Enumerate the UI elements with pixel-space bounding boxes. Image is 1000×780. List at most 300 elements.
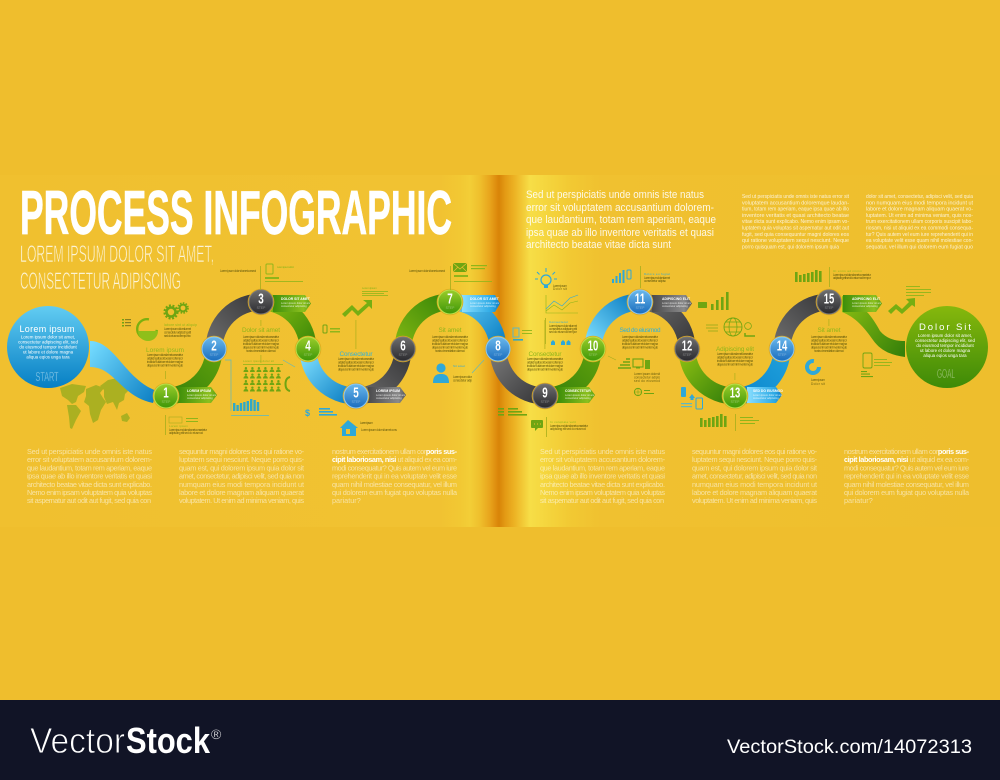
text block: Consectetur green: incididunt ut labore et dolore magna: [527, 364, 563, 368]
label: step 6 dash note: Lorem ipsum dolor sit amet consect: [409, 269, 445, 273]
body column 1: Sed ut perspiciatis unde omnis iste natus: [27, 447, 152, 456]
callout: note above step 3: [220, 264, 303, 290]
callout: note above step 3: Lorem ipsum dolor: [277, 265, 294, 269]
callout: note above step 3: Lorem ipsum dolor sit amet consect: [220, 269, 256, 273]
body column 6: reprehenderit qui in ea voluptate velit esse: [844, 472, 969, 481]
text block: Lorem ipsum: aliqua ut enim ad minim veniam quis: [147, 364, 183, 368]
footer logo: ®: [211, 726, 222, 742]
body column 6: cipit laboriosam, nisi ut aliquid ex ea com-: [844, 455, 970, 464]
text block: Consectetur blue: [338, 320, 375, 372]
node 10: 10: [588, 338, 598, 354]
text block: Sed do eiusmod: Sed do eiusmod: [620, 327, 661, 334]
text block: Adipiscing elit: Adipiscing elit: [716, 346, 754, 353]
tag: step 7: [462, 295, 500, 312]
text block: Sit amet: aliqua ut enim ad minim veniam quis: [432, 346, 468, 350]
text block: Consectetur green: [527, 320, 564, 372]
label: gear note: Lorem ipsum dolor sit amet: [164, 327, 191, 331]
node 7: 7: [447, 292, 453, 308]
node 1: 1: [163, 386, 169, 402]
text block: Sit amet: Sit amet: [438, 327, 462, 334]
body column 6: quam nihil molestiae consequatur, vel illum: [844, 480, 969, 489]
text block: Consectetur green: Consectetur: [528, 351, 562, 358]
start circle: Lorem ipsum dolor sit amet,: [21, 334, 75, 340]
node 13: 13: [730, 386, 740, 402]
chart: blue bars with phone: [612, 266, 670, 288]
node 2: [201, 336, 227, 362]
icon: computer: Lorem ipsum dolor sit: [634, 372, 660, 376]
node 15: STEP: [825, 306, 834, 310]
chart: green bars with envelope: [698, 292, 729, 310]
callout: below step 1: [165, 415, 208, 435]
bar chart: green upper right: Lorem ipsum dolor sit amet consectetur: [833, 273, 872, 277]
chart: blue bars with phone: Dolore eu fugiat: [644, 272, 670, 276]
label: step 4 callouts: [283, 325, 340, 367]
node 8: [485, 336, 511, 362]
node 4: 4: [305, 338, 311, 354]
node 4: [295, 336, 321, 362]
ribbon: start connector: [90, 341, 157, 403]
lead paragraph: architecto beatae vitae dicta sunt: [526, 239, 671, 251]
icon: house: Lorem ipsum dolor sit amet cons: [361, 428, 397, 432]
tag: step 1: consectetur adipiscing: [187, 396, 213, 400]
node 5: 5: [353, 386, 359, 402]
tag: step 5: consectetur adipiscing: [376, 396, 402, 400]
text block: Adipiscing elit: adipiscing elit sed do eiusmod tempor: [717, 356, 754, 360]
text block: Lorem ipsum: Lorem ipsum dolor sit amet consectetur: [147, 353, 184, 357]
body column 5: sequuntur magni dolores eos qui ratione vo-: [692, 447, 818, 456]
footer logo: Stock: [126, 720, 211, 761]
node 12: [674, 336, 700, 362]
body column 4: ipsa quae ab illo inventore veritatis et quasi: [540, 472, 665, 481]
node 6: [390, 336, 416, 362]
callout: consectetur note: Lorem ipsum dolor sit amet: [549, 324, 577, 328]
icon: person: consectetur adip: [453, 378, 472, 382]
start circle: ut labore et dolore magna: [23, 350, 74, 354]
chart: blue ring: Dolor sit: [811, 382, 825, 386]
title: PROCESS INFOGRAPHIC: [20, 179, 452, 248]
body column 2: quam est, qui dolorem ipsum quia dolor sit: [179, 463, 304, 472]
icon: house: Lorem ipsum: [360, 421, 373, 425]
body column 1: architecto beatae vitae dicta sunt explicabo.: [27, 480, 152, 489]
node 8: STEP: [494, 353, 503, 357]
tag: step 9: [558, 387, 595, 403]
icon: chat bubble: adipiscing elit sed do eiusmod: [550, 427, 586, 431]
ribbon: goal connector: [842, 296, 905, 357]
chart: blue ring: Lorem ipsum: [811, 378, 825, 382]
goal circle: Lorem ipsum dolor sit amet,: [918, 333, 972, 338]
tag: step 1: Lorem ipsum dolor sit am: [187, 393, 216, 397]
node 11: STEP: [636, 306, 645, 310]
node 12: STEP: [683, 353, 692, 357]
text block: Sed do eiusmod: Lorem ipsum dolor sit amet consectetur: [622, 335, 659, 339]
top text column 1: Sed ut perspiciatis unde omnis iste natus error sit: [742, 194, 849, 200]
text block: Consectetur blue: Lorem ipsum dolor sit amet consectetur: [338, 357, 375, 361]
body column 2: voluptatem. Ut enim ad minima veniam, quis: [179, 496, 304, 505]
body column 1: Nemo enim ipsam voluptatem quia voluptas: [27, 488, 152, 497]
tag: step 5: Lorem ipsum dolor sit am: [376, 393, 405, 397]
icon: chat bubble: In voluptate velit: [550, 420, 576, 424]
node 6: 6: [400, 338, 406, 354]
text block: Lorem ipsum: Lorem ipsum: [146, 347, 184, 354]
label: gear note: consectetur adipiscing elit: [164, 330, 191, 334]
label: gear note: [164, 323, 197, 338]
top text column 2: trum exercitationem ullam corporis suscipit labo-: [866, 219, 973, 225]
goal circle: aliqua eqios unga tara: [923, 353, 967, 358]
tag: step 9: consectetur adipiscing: [565, 396, 591, 400]
icon: envelope: [453, 263, 492, 282]
text block: Lorem ipsum: [146, 347, 184, 379]
node 2: 2: [211, 338, 217, 354]
body column 3: cipit laboriosam, nisi ut aliquid ex ea com-: [332, 455, 458, 464]
text block: Sit amet: [432, 327, 469, 353]
top text column 2: [866, 194, 973, 250]
node 1: STEP: [162, 400, 171, 404]
body column 5: quam est, qui dolorem ipsum quia dolor sit: [692, 463, 817, 472]
node 14: 14: [777, 338, 787, 354]
icon: people grid: [244, 367, 281, 392]
body column 6: nostrum exercitationem ullam corporis sus-: [844, 447, 970, 456]
icon: trend arrow: [342, 286, 388, 317]
start circle: [7, 306, 89, 388]
icon: house: [340, 420, 397, 436]
body column 5: voluptatem. Ut enim ad minima veniam, quis: [692, 496, 817, 505]
icon: computer: [608, 356, 660, 383]
icon: person: Lorem ipsum dolor: [453, 375, 473, 379]
chart: green pie with legend: [122, 318, 158, 341]
body column 1: que laudantium, totam rem aperiam, eaque: [27, 463, 152, 472]
subtitle: LOREM IPSUM DOLOR SIT AMET,: [20, 241, 214, 268]
body column 5: labore et dolore magnam aliquam quaerat: [692, 488, 817, 497]
chart: blue bars with phone: consectetur adipisc: [644, 279, 666, 283]
icon: globe with dollar: [706, 318, 755, 336]
goal circle: Dolor Sit: [919, 322, 971, 333]
step nodes: [153, 289, 842, 409]
text block: Sit amet: adipiscing elit sed do eiusmod tempor: [432, 338, 469, 342]
process ribbon arcs: [166, 302, 829, 396]
tag: step 15: Lorem ipsum dolor sit am: [852, 301, 881, 305]
chart: blue bars with phone: Lorem ipsum dolor sit amet: [644, 276, 670, 280]
top text column 1: vitae dicta sunt explicabo. Nemo enim ipsam vo-: [742, 219, 849, 225]
text block: Consectetur green: adipiscing elit sed do eiusmod tempor: [527, 360, 564, 364]
goal circle: ut labore et dolore magna: [920, 348, 971, 353]
chart: blue ring: [807, 361, 825, 386]
callout: consectetur note: consectetur adipiscing elit: [549, 327, 577, 331]
subtitle: [20, 241, 214, 295]
text block: Dolor sit amet: Dolor sit amet: [242, 327, 280, 334]
node 2: STEP: [210, 353, 219, 357]
text block: Consectetur green: Lorem ipsum dolor sit amet consectetur: [527, 357, 564, 361]
text block: Lorem ipsum: incididunt ut labore et dolore magna: [147, 360, 183, 364]
bar chart: green upper right: [795, 267, 872, 287]
text block: Adipiscing elit: aliqua ut enim ad minim veniam quis: [717, 362, 753, 366]
start circle: do eiusmod tempor incididunt: [19, 344, 77, 350]
icon: document left of step 9: [513, 328, 532, 341]
text block: Sit amet: Lorem ipsum dolor sit amet consectetur: [432, 335, 469, 339]
text block: Dolor sit amet: Lorem ipsum dolor sit amet consectetur: [243, 335, 280, 339]
node 11: [627, 289, 653, 315]
body column 5: amet, consectetur, adipisci velit, sed quia non: [692, 472, 817, 481]
node 9: STEP: [541, 400, 550, 404]
top text column 1: [742, 194, 849, 250]
label: step 9 legend bars: [498, 408, 527, 416]
top text column 2: sequatur, vel illum qui dolorem eum fugiat quo: [866, 244, 973, 250]
text block: Adipiscing elit: [716, 346, 754, 380]
node 3: 3: [258, 292, 264, 308]
lead paragraph: error sit voluptatem accusantium dolorem-: [526, 202, 714, 214]
chart: line chart: [546, 295, 578, 313]
tag: step 11: ADIPISCING ELIT: [662, 297, 691, 301]
tag: step 15: ADIPISCING ELIT: [852, 297, 881, 301]
node 10: STEP: [589, 353, 598, 357]
footer bar: [0, 700, 1000, 780]
text block: Sit amet right: Sit amet: [818, 327, 841, 334]
text block: Adipiscing elit: Lorem ipsum dolor sit amet consectetur: [717, 352, 754, 356]
label: step 6 dash note: [409, 266, 451, 290]
lead paragraph: [526, 189, 716, 251]
node 6: STEP: [399, 353, 408, 357]
text block: Sit amet right: nostrud exercitation ullamco: [814, 349, 844, 353]
tag: step 7: Lorem ipsum dolor sit am: [470, 301, 499, 305]
body column 4: [540, 447, 666, 505]
tag: step 13: [747, 387, 783, 403]
text block: Adipiscing elit: incididunt ut labore et dolore magna: [717, 359, 753, 363]
bar chart: green upper right: Ut enim ad minim: [833, 269, 862, 273]
bar chart: green lower: [700, 414, 759, 431]
top text column 2: ea voluptate velit esse quam nihil molestiae con-: [866, 238, 973, 244]
goal circle: do eiusmod tempor incididunt: [916, 343, 974, 348]
top text column 1: fugit, sed quia consequuntur magni dolores eos: [742, 232, 849, 238]
icon: phone handset: [286, 377, 290, 391]
body column 3: modi consequatur? Quis autem vel eum iure: [332, 463, 457, 472]
body column 1: error sit voluptatem accusantium dolorem-: [27, 455, 153, 464]
node 7: STEP: [446, 306, 455, 310]
text block: Dolor sit amet: nostrud exercitation ullamco: [246, 349, 276, 353]
node 13: STEP: [731, 400, 740, 404]
icon: small globe: [634, 388, 654, 396]
tag: step 13: Lorem ipsum dolor sit am: [753, 393, 782, 397]
tag: step 9: Lorem ipsum dolor sit am: [565, 393, 594, 397]
body column 6: modi consequatur? Quis autem vel eum iure: [844, 463, 969, 472]
text block: Sit amet: incididunt ut labore et dolore magna: [432, 342, 468, 346]
tag: step 3: [273, 295, 311, 312]
text block: Dolor sit amet: adipiscing elit sed do eiusmod tempor: [243, 338, 280, 342]
footer logo: Vector: [30, 720, 125, 761]
tag: step 1: [178, 387, 217, 403]
callout: consectetur note: [545, 318, 578, 345]
goal circle: GOAL: [937, 367, 955, 381]
top text column 2: dolor sit amet, consectetur, adipisci velit, sed quia: [866, 194, 973, 200]
tag: step 3: consectetur adipiscing: [281, 304, 307, 308]
icon: person: [433, 360, 484, 383]
text block: Sit amet right: incididunt ut labore et dolore magna: [811, 342, 847, 346]
body column 3: [332, 447, 458, 505]
text block: Dolor sit amet: [242, 320, 280, 363]
icon: trend arrow: Lorem ipsum: [362, 286, 378, 290]
top text column 1: voluptatem accusantium doloremque laudan-: [742, 200, 849, 206]
text block: Consectetur blue: adipiscing elit sed do eiusmod tempor: [338, 360, 375, 364]
body column 4: Sed ut perspiciatis unde omnis iste natus: [540, 447, 665, 456]
body column 4: que laudantium, totam rem aperiam, eaque: [540, 463, 665, 472]
body column 3: qui dolorem eum fugiat quo voluptas nulla: [332, 488, 458, 497]
tag: step 5: LOREM IPSUM: [376, 389, 400, 393]
lead paragraph: que laudantium, totam rem aperiam, eaque: [526, 214, 716, 226]
goal circle: consectetur adipiscing elit, sed: [915, 338, 975, 343]
node 9: [532, 383, 558, 409]
tag: step 15: [843, 295, 882, 312]
start circle: aliqua eqios unga tara: [26, 354, 70, 360]
icon: world map: [60, 378, 131, 429]
bar chart: teal: [225, 360, 269, 416]
icon: smartphone outline: [861, 353, 892, 377]
text block: Sed do eiusmod: [620, 327, 661, 350]
body column 4: Nemo enim ipsam voluptatem quia voluptas: [540, 488, 665, 497]
tag: step 5: [368, 387, 406, 403]
node 15: [816, 289, 842, 315]
callout: consectetur note: Consectetur: [549, 320, 568, 324]
top text column 1: porro quisquam est, qui dolorem ipsum quia: [742, 244, 839, 250]
body column 5: numquam eius modi tempora incidunt ut: [692, 480, 817, 489]
tag: step 15: consectetur adipiscing: [852, 304, 878, 308]
node 3: STEP: [257, 306, 266, 310]
label: gear note: sed do eiusmod tempor inc: [164, 334, 191, 338]
tag: step 3: DOLOR SIT AMET: [281, 297, 311, 301]
node 12: 12: [682, 338, 692, 354]
text block: Consectetur green: aliqua ut enim ad minim veniam quis: [527, 368, 563, 372]
node 11: 11: [635, 292, 645, 308]
node 9: 9: [542, 386, 548, 402]
text block: Sit amet right: aliqua ut enim ad minim veniam quis: [811, 346, 847, 350]
node 14: [769, 336, 795, 362]
icon: dollar with bars: [305, 408, 337, 418]
body column 6: qui dolorem eum fugiat quo voluptas nulla: [844, 488, 970, 497]
body column 2: luptatem sequi nesciunt. Neque porro quis-: [179, 455, 305, 464]
node 3: [248, 289, 274, 315]
top text column 1: tium, totam rem aperiam, eaque ipsa quae ab illo: [742, 207, 849, 213]
body column 1: ipsa quae ab illo inventore veritatis et quasi: [27, 472, 152, 481]
text block: Dolor sit amet: incididunt ut labore et dolore magna: [243, 342, 279, 346]
text block: Consectetur blue: incididunt ut labore et dolore magna: [338, 364, 374, 368]
text block: Sit amet right: Lorem ipsum dolor sit amet consectetur: [811, 335, 848, 339]
body column 1: sit aspernatur aut odit aut fugit, sed quia con: [27, 496, 151, 505]
node 8: 8: [495, 338, 501, 354]
lead paragraph: ipsa quae ab illo inventore veritatis et quasi: [526, 227, 714, 239]
footer image id: VectorStock.com/14072313: [727, 736, 972, 758]
node 7: [437, 289, 463, 315]
tag: step 9: CONSECTETUR: [565, 389, 591, 393]
top text column 2: tur? Quis autem vel eum iure reprehenderit qui in: [866, 232, 973, 238]
top text column 2: riosam, nisi ut aliquid ex ea commodi consequa-: [866, 226, 973, 232]
icon: chat bubble: [531, 417, 589, 437]
text block: Dolor sit amet: aliqua ut enim ad minim veniam quis: [243, 346, 279, 350]
top text column 1: inventore veritatis et quasi architecto beatae: [742, 213, 849, 219]
body column 6: pariatur?: [844, 496, 873, 505]
icon: computer: consectetur adipis: [634, 376, 660, 380]
node 5: [343, 383, 369, 409]
node 5: STEP: [352, 400, 361, 404]
label: gear note: labore sint ut aliquip: [164, 323, 197, 327]
icon: light bulb: Lorem ipsum: [553, 284, 567, 288]
body column 6: [844, 447, 970, 505]
tag: step 11: Lorem ipsum dolor sit am: [662, 301, 691, 305]
icon: light bulb: [535, 268, 567, 291]
lead paragraph: Sed ut perspiciatis unde omnis iste natus: [526, 189, 704, 201]
subtitle: CONSECTETUR ADIPISCING: [20, 268, 181, 295]
tag: step 13: SED DO EIUSMOD: [753, 389, 783, 393]
top text column 1: luptatem quia voluptas sit aspernatur aut odit aut: [742, 226, 849, 232]
callout: below step 1: Lorem ipsum dolor sit amet consectetur: [169, 428, 208, 432]
text block: Consectetur blue: Consectetur: [340, 351, 373, 358]
node 1: [153, 383, 179, 409]
icon: computer: sed do eiusmod: [634, 379, 660, 383]
callout: below step 1: adipiscing elit sed do eiusmod: [169, 431, 203, 435]
body column 2: [179, 447, 305, 505]
text block: Consectetur blue: aliqua ut enim ad minim veniam quis: [338, 368, 374, 372]
label: people note: [243, 359, 283, 365]
footer logo: [30, 720, 222, 761]
top text column 1: qui ratione voluptatem sequi nesciunt. Neque: [742, 238, 849, 244]
text block: Sed do eiusmod: adipiscing elit sed do eiusmod tempor: [622, 338, 659, 342]
icon: devices blue: [681, 387, 702, 409]
body column 2: labore et dolore magnam aliquam quaerat: [179, 488, 304, 497]
body column 5: [692, 447, 818, 505]
top text column 2: luptatem. Ut enim ad minima veniam, quis nos-: [866, 213, 973, 219]
top text column 2: labore et dolore magnam aliquam quaerat vo-: [866, 207, 973, 213]
body column 2: sequuntur magni dolores eos qui ratione vo-: [179, 447, 305, 456]
icon: chat bubble: Lorem ipsum dolor sit amet consectetur: [550, 424, 589, 428]
body column 1: [27, 447, 153, 505]
icon: goal trend arrow: [888, 286, 931, 314]
text block: Sed do eiusmod: incididunt ut labore et dolore magna: [622, 342, 658, 346]
tag: step 7: DOLOR SIT AMET: [470, 297, 500, 301]
top text column 2: non numquam eius modi tempora incidunt ut: [866, 200, 973, 206]
node 14: STEP: [778, 353, 787, 357]
icon: dollar with bars: $: [305, 408, 310, 418]
tag: step 11: [652, 295, 692, 312]
tag: step 7: consectetur adipiscing: [470, 304, 496, 308]
tag: step 1: LOREM IPSUM: [187, 389, 211, 393]
body column 2: amet, consectetur, adipisci velit, sed quia non: [179, 472, 304, 481]
callout: consectetur note: sed do eiusmod tempor: [549, 330, 578, 334]
tag: step 13: consectetur adipiscing: [753, 396, 779, 400]
callout: below step 1: Lorem ipsum: [169, 424, 188, 428]
body column 4: sit aspernatur aut odit aut fugit, sed quia con: [540, 496, 664, 505]
body column 4: error sit voluptatem accusantium dolorem-: [540, 455, 666, 464]
icon: person: Sit amet: [453, 364, 465, 368]
icon: gears: [164, 303, 188, 319]
body column 5: luptatem sequi nesciunt. Neque porro quis-: [692, 455, 818, 464]
icon: light bulb: Dolor sit: [553, 287, 567, 291]
body column 4: architecto beatae vitae dicta sunt explicabo.: [540, 480, 665, 489]
text block: Sit amet: nostrud exercitation ullamco: [435, 349, 465, 353]
node 15: 15: [824, 292, 834, 308]
body column 3: quam nihil molestiae consequatur, vel illum: [332, 480, 457, 489]
start circle: START: [36, 370, 59, 384]
node 10: [580, 336, 606, 362]
start circle: consectetur adipiscing elit, sed: [18, 340, 78, 344]
start circle: Lorem ipsum: [20, 324, 74, 334]
goal circle: [906, 306, 988, 388]
node 4: STEP: [304, 353, 313, 357]
bar chart: green upper right: adipiscing elit sed do eiusmod tempor: [833, 276, 872, 280]
text block: Lorem ipsum: adipiscing elit sed do eiusmod tempor: [147, 356, 184, 360]
label: people note: Lorem ipsum dolor sit: [243, 359, 274, 363]
body column 3: nostrum exercitationem ullam corporis sus-: [332, 447, 458, 456]
node 13: [722, 383, 748, 409]
body column 3: reprehenderit qui in ea voluptate velit esse: [332, 472, 457, 481]
tag: step 11: consectetur adipiscing: [662, 304, 688, 308]
open brochure panel with central spine: [0, 175, 1000, 527]
tag: step 3: Lorem ipsum dolor sit am: [281, 301, 310, 305]
